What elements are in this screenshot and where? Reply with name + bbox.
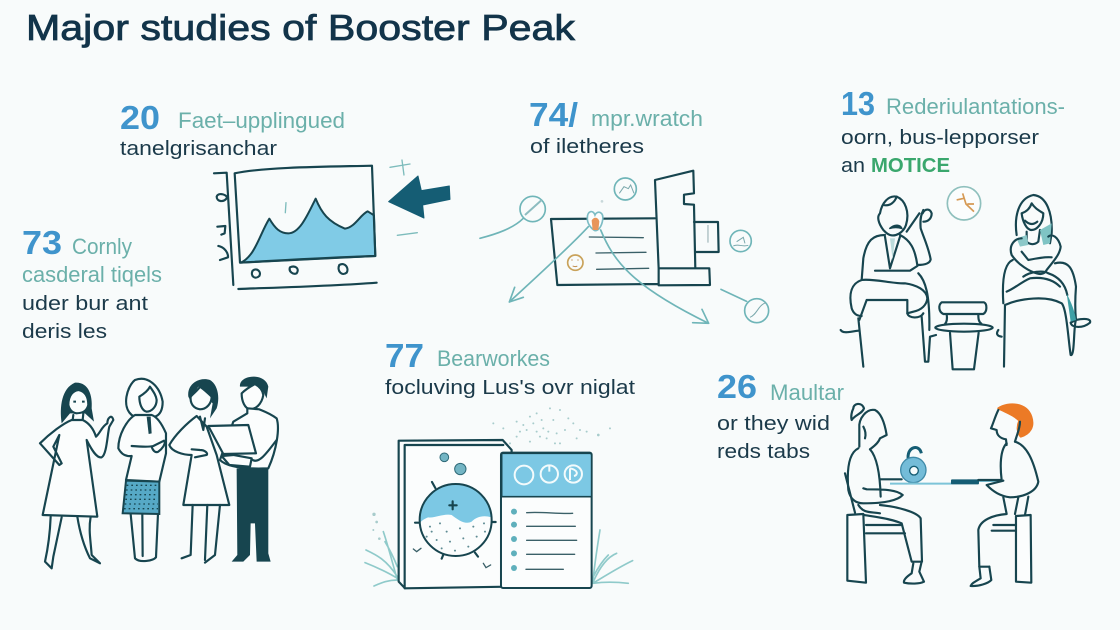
figure: woman with braid [169, 379, 229, 563]
area chart illustration [214, 160, 450, 289]
text block: study 74 [529, 96, 703, 158]
group of four people [40, 377, 278, 568]
figure: woman [997, 195, 1090, 367]
text block: study 74: 74/ [529, 96, 578, 133]
text block: study 13: MOTICE [871, 155, 950, 177]
figure: woman in dress [40, 383, 113, 568]
text block: study 73: 73 [22, 224, 62, 261]
text block: study 13: Rederiulantations- [886, 94, 1065, 119]
text block: study 20: 20 [120, 99, 160, 136]
text block: study 77 [385, 337, 636, 399]
text block: study 13: 13 [841, 85, 875, 122]
table [890, 479, 1000, 484]
icons: panel dials [515, 465, 582, 484]
text block: study 26: Maultar [770, 380, 844, 405]
dots [440, 453, 449, 462]
text block: study 77: 77 [385, 337, 424, 374]
text block: study 74: of iletheres [530, 136, 644, 158]
text block: study 73: uder bur ant [22, 293, 149, 315]
text block: study 77: Bearworkes [437, 346, 550, 371]
text block: study 20 [120, 99, 345, 160]
icon: dark arrow [389, 176, 450, 218]
particles [372, 407, 611, 540]
figure: person with orange hair [971, 404, 1038, 586]
icon: padlock [901, 448, 926, 483]
title: Major studies of Booster Peak [26, 7, 576, 48]
two people seated around a table [841, 187, 1090, 369]
list rows [511, 509, 577, 571]
figure: woman in patterned skirt [118, 379, 166, 561]
text block: study 73: Cornly [72, 234, 132, 259]
text block: study 13 [841, 85, 1065, 177]
text block: study 26: or they wid [717, 413, 830, 435]
text block: study 26: 26 [717, 368, 757, 405]
grass [365, 530, 633, 586]
figure: man with laptop [208, 377, 278, 562]
text block: study 74: mpr.wratch [591, 106, 703, 131]
text block: study 73: deris les [22, 321, 107, 343]
text block: study 26 [717, 368, 844, 463]
text block: study 13: oorn, bus-lepporser [841, 127, 1039, 149]
icon: clock badge [947, 187, 981, 220]
two people at a table with padlock [845, 404, 1038, 586]
text block: study 73 [22, 224, 162, 343]
figure: woman with bun [845, 404, 924, 584]
figure: man [841, 196, 936, 367]
book and panel illustration [365, 407, 633, 588]
text block: study 20: tanelgrisanchar [120, 138, 277, 160]
text block: study 73: casderal tiqels [22, 262, 162, 287]
text block: study 20: Faet–upplingued [178, 108, 345, 133]
text block: study 77: focluving Lus's ovr niglat [385, 377, 636, 399]
device diagram with arrows [480, 171, 769, 323]
text block: study 26: reds tabs [717, 441, 810, 463]
table [935, 302, 993, 369]
circular gauge [415, 482, 496, 559]
text block: study 13: an [841, 155, 865, 177]
